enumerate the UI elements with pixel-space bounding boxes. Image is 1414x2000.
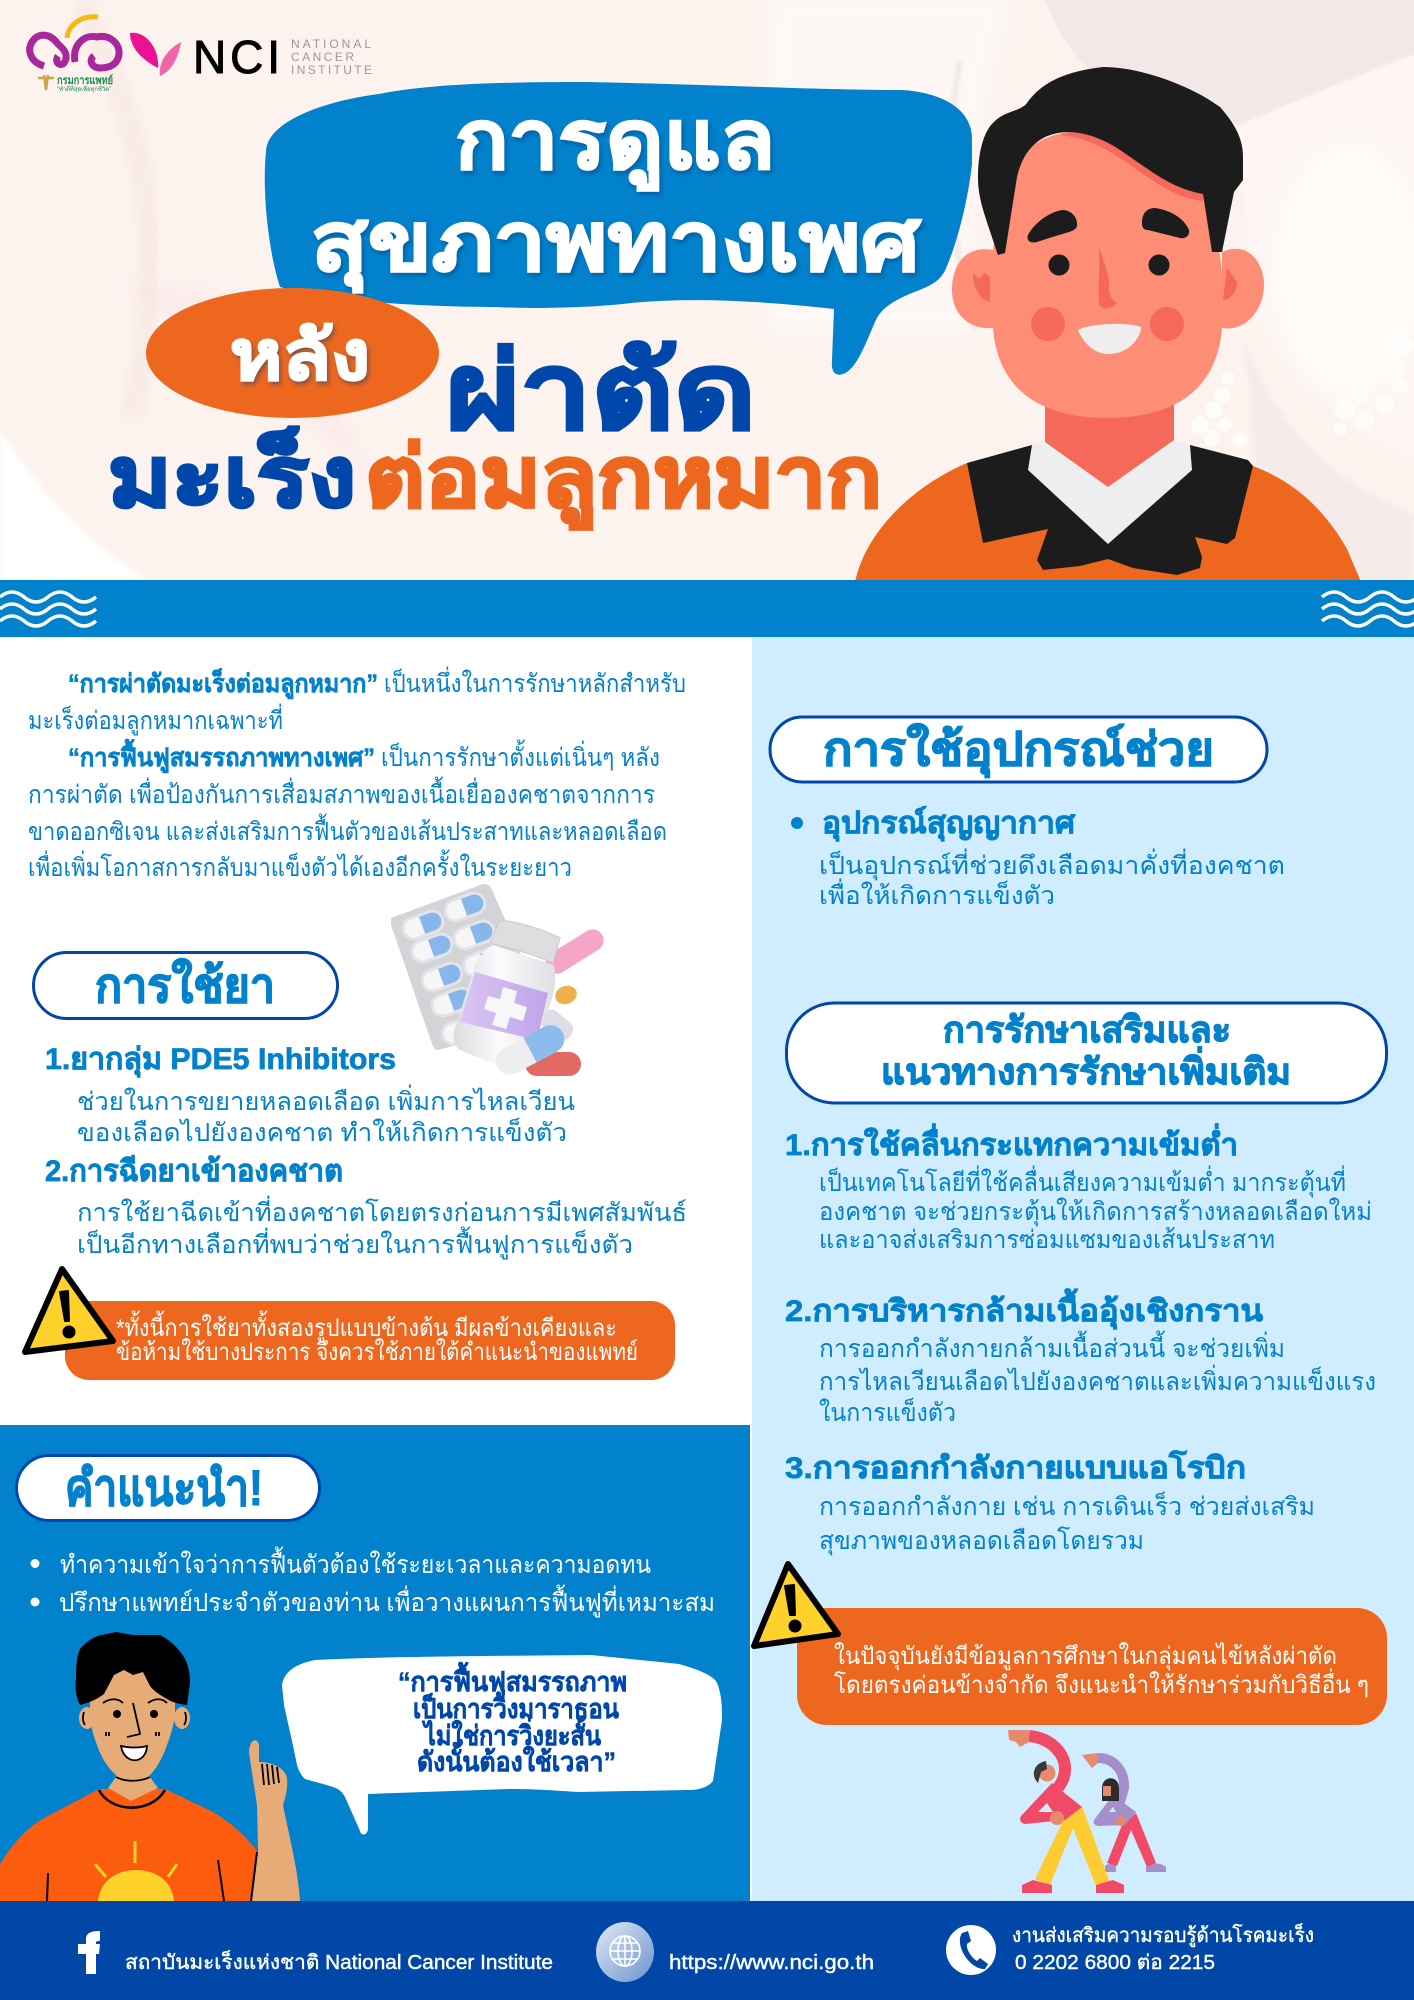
header background xyxy=(0,0,1414,582)
warning callout: medication xyxy=(25,1269,675,1380)
intro text: ขาดออกซิเจน และส่งเสริมการฟื้นตัวของเส้นประสาทและหลอดเลือด xyxy=(28,813,667,846)
complementary treatment list: 3.การออกกำลังกายแบบแอโรบิก xyxy=(785,1449,1246,1485)
neck xyxy=(108,1770,158,1801)
bottle xyxy=(454,945,555,1064)
intro text: มะเร็งต่อมลูกหมากเฉพาะที่ xyxy=(28,703,283,736)
devices text: เพื่อให้เกิดการแข็งตัว xyxy=(819,878,1055,910)
medication list: ช่วยในการขยายหลอดเลือด เพิ่มการไหลเวียน xyxy=(77,1084,575,1116)
pill heading: complementary treatment: แนวทางการรักษาเพิ่มเติม xyxy=(881,1046,1291,1092)
quote bubble: ไม่ใช่การวิ่งยะสั้น xyxy=(421,1715,601,1751)
warning callout: evidence xyxy=(754,1564,1387,1725)
medication list: การใช้ยาฉีดเข้าที่องคชาตโดยตรงก่อนการมีเพศสัมพันธ์ xyxy=(77,1195,687,1227)
left white panel xyxy=(0,637,752,1901)
hair xyxy=(75,1632,190,1705)
pill heading: complementary treatment xyxy=(786,1003,1386,1103)
neck xyxy=(1045,380,1174,487)
title oval: after: หลัง xyxy=(230,318,370,394)
facebook label: สถาบันมะเร็งแห่งชาติ National Cancer Institute xyxy=(125,1949,553,1974)
quote bubble: เป็นการวิ่งมาราธอน xyxy=(413,1689,619,1724)
complementary treatment list xyxy=(785,1123,1376,1556)
pill heading: complementary treatment: การรักษาเสริมและ xyxy=(943,1009,1231,1050)
face xyxy=(991,131,1223,418)
white pill xyxy=(538,1006,576,1044)
pill heading: advice: คำแนะนำ! xyxy=(65,1460,263,1516)
collar black xyxy=(967,445,1253,575)
contact text: 0 2202 6800 ต่อ 2215 xyxy=(1015,1952,1215,1974)
intro text xyxy=(28,666,686,882)
woman xyxy=(1082,1753,1166,1872)
icon: medicine xyxy=(391,884,608,1080)
pill heading: devices xyxy=(770,717,1267,782)
medication list: 1.ยากลุ่ม PDE5 Inhibitors xyxy=(45,1043,396,1078)
warning callout: evidence: โดยตรงค่อนข้างจำกัด จึงแนะนำให้รักษาร่วมกับวิธีอื่น ๆ xyxy=(834,1668,1369,1699)
eyes xyxy=(1048,254,1070,276)
logo: NCI wordmark xyxy=(193,31,372,83)
ears xyxy=(79,1707,95,1729)
title: cancer: มะเร็ง xyxy=(108,426,356,524)
red pill xyxy=(525,1052,581,1076)
yellow pill xyxy=(553,983,579,1007)
title line 1: การดูแล xyxy=(455,95,775,191)
blister pack xyxy=(391,884,550,1050)
advice list: ปรึกษาแพทย์ประจำตัวของท่าน เพื่อวางแผนการฟื้นฟูที่เหมาะสม xyxy=(59,1584,715,1618)
eyebrows xyxy=(1027,208,1189,243)
website: https://www.nci.go.th xyxy=(669,1952,874,1974)
intro text: “การผ่าตัดมะเร็งต่อมลูกหมาก” xyxy=(68,668,378,700)
capsule xyxy=(491,1020,569,1080)
hair shadow xyxy=(1060,132,1205,201)
collar white xyxy=(1028,440,1192,544)
face xyxy=(90,1670,175,1780)
medication list: ของเลือดไปยังองคชาต ทำให้เกิดการแข็งตัว xyxy=(77,1117,567,1147)
arm xyxy=(249,1740,300,1901)
wave banner xyxy=(0,580,1414,637)
quote bubble: ดังนั้นต้องใช้เวลา” xyxy=(417,1741,616,1777)
icon: facebook xyxy=(78,1931,100,1974)
contact text: งานส่งเสริมความรอบรู้ด้านโรคมะเร็ง xyxy=(1012,1922,1314,1948)
complementary treatment list: 2.การบริหารกล้ามเนื้ออุ้งเชิงกราน xyxy=(785,1288,1264,1330)
shirt xyxy=(855,463,1361,582)
pill heading: devices: การใช้อุปกรณ์ช่วย xyxy=(823,722,1214,778)
contact text xyxy=(1012,1922,1314,1974)
quote bubble xyxy=(282,1655,722,1835)
pill heading: advice xyxy=(16,1456,320,1520)
icon: warning triangle xyxy=(754,1564,838,1646)
logo: NCI wordmark: NATIONAL xyxy=(291,37,371,51)
title: surgery: ผ่าตัด xyxy=(446,333,756,451)
intro text: เพื่อเพิ่มโอกาสการกลับมาแข็งตัวได้เองอีกครั้งในระยะยาว xyxy=(28,849,572,882)
intro text: “การฟื้นฟูสมรรถภาพทางเพศ” xyxy=(68,738,375,774)
complementary treatment list: 1.การใช้คลื่นกระแทกความเข้มต่ำ xyxy=(785,1123,1238,1162)
shirt sun xyxy=(47,1841,257,1901)
panel: advice xyxy=(0,1425,750,1901)
pill heading: medication: การใช้ยา xyxy=(95,957,275,1013)
collar xyxy=(99,1790,165,1808)
advice list xyxy=(30,1546,715,1618)
devices text: เป็นอุปกรณ์ที่ช่วยดึงเลือดมาคั่งที่องคชาต xyxy=(819,848,1285,881)
logo: Department of Medical Services: กรมการแพทย์ xyxy=(57,74,113,87)
devices text xyxy=(791,806,1285,910)
quote bubble: “การฟื้นฟูสมรรถภาพ xyxy=(398,1661,627,1699)
complementary treatment list: การออกกำลังกายกล้ามเนื้อส่วนนี้ จะช่วยเพิ่ม xyxy=(819,1330,1285,1363)
mouth xyxy=(1078,324,1141,354)
cheeks xyxy=(1031,307,1065,341)
title line 2: สุขภาพทางเพศ xyxy=(311,197,922,293)
logo: NCI wordmark: INSTITUTE xyxy=(291,63,372,77)
man illustration xyxy=(855,67,1361,582)
complementary treatment list: การไหลเวียนเลือดไปยังองคชาตและเพิ่มความแข็งแรง xyxy=(819,1364,1376,1396)
right light blue panel xyxy=(752,637,1414,1901)
complementary treatment list: การออกกำลังกาย เช่น การเดินเร็ว ช่วยส่งเสริม xyxy=(819,1491,1315,1521)
title: prostate: ต่อมลูกหมาก xyxy=(365,430,882,530)
shirt xyxy=(0,1789,257,1901)
title oval: after xyxy=(146,288,439,418)
man xyxy=(1008,1730,1124,1893)
footer xyxy=(0,1901,1414,2000)
pink pill xyxy=(542,925,608,978)
devices text: อุปกรณ์สุญญากาศ xyxy=(822,806,1076,842)
intro text: เป็นการรักษาตั้งแต่เนิ่นๆ หลัง xyxy=(381,739,660,772)
icon: warning triangle xyxy=(25,1269,113,1352)
eyes and mouth xyxy=(83,1699,186,1781)
complementary treatment list: ในการแข็งตัว xyxy=(819,1397,956,1427)
logo: Department of Medical Services xyxy=(30,17,119,93)
complementary treatment list: และอาจส่งเสริมการซ่อมแซมของเส้นประสาท xyxy=(819,1226,1275,1254)
pill heading: medication xyxy=(34,952,338,1018)
ear right xyxy=(1222,249,1264,328)
complementary treatment list: สุขภาพของหลอดเลือดโดยรวม xyxy=(819,1526,1144,1556)
intro text: เป็นหนึ่งในการรักษาหลักสำหรับ xyxy=(384,666,686,698)
icon: phone xyxy=(946,1925,996,1975)
logo: pink heart xyxy=(130,33,181,76)
ear left xyxy=(952,249,993,328)
warning callout: medication: ข้อห้ามใช้บางประการ จึงควรใช้ภายใต้คำแนะนำของแพทย์ xyxy=(116,1338,638,1366)
logo: NCI wordmark: NCI xyxy=(193,31,280,83)
intro text: การผ่าตัด เพื่อป้องกันการเสื่อมสภาพของเนื้อเยื่อองคชาตจากการ xyxy=(28,776,655,809)
logo: Department of Medical Services: “ทำดีที่สุดเพื่อทุกชีวิต” xyxy=(57,85,111,93)
title speech bubble xyxy=(265,82,972,375)
complementary treatment list: องคชาต จะช่วยกระตุ้นให้เกิดการสร้างหลอดเลือดใหม่ xyxy=(819,1197,1372,1227)
complementary treatment list: เป็นเทคโนโลยีที่ใช้คลื่นเสียงความเข้มต่ำ มากระตุ้นที่ xyxy=(819,1165,1346,1198)
advice list: ทำความเข้าใจว่าการฟื้นตัวต้องใช้ระยะเวลาและความอดทน xyxy=(60,1546,651,1579)
character pointing xyxy=(0,1632,300,1901)
warning callout: evidence: ในปัจจุบันยังมีข้อมูลการศึกษาในกลุ่มคนไข้หลังผ่าตัด xyxy=(834,1642,1337,1671)
hair xyxy=(978,67,1243,255)
logos xyxy=(30,17,372,93)
logo: NCI wordmark: CANCER xyxy=(291,50,354,64)
medication list: 2.การฉีดยาเข้าองคชาต xyxy=(45,1155,343,1188)
medication list xyxy=(45,1043,687,1260)
medication list: เป็นอีกทางเลือกที่พบว่าช่วยในการฟื้นฟูการแข็งตัว xyxy=(77,1226,633,1260)
nose xyxy=(1099,248,1117,308)
icon: globe xyxy=(596,1922,654,1982)
warning callout: medication: *ทั้งนี้การใช้ยาทั้งสองรูปแบบข้างต้น มีผลข้างเคียงและ xyxy=(116,1310,617,1343)
icon: people exercising xyxy=(1008,1730,1166,1893)
